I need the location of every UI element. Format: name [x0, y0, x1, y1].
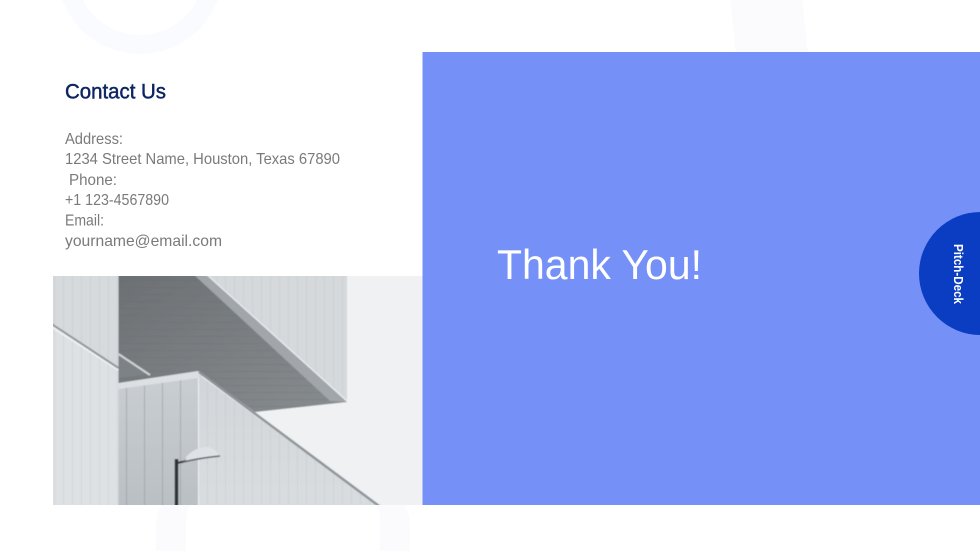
sky [50, 273, 426, 509]
text block: contact details: Phone: [69, 172, 117, 189]
background ring: top left [66, 0, 214, 44]
small ledge [119, 357, 142, 372]
upper right wall [205, 273, 347, 402]
middle block cornice [118, 371, 204, 389]
heading: Contact Us: Contact Us [65, 80, 166, 104]
background ring: bottom [156, 505, 410, 551]
panel: blue background [422, 52, 980, 505]
text block: contact details: Email: [65, 212, 104, 230]
text block: contact details: 1234 Street Name, Houston, Texas 67890 [65, 151, 340, 168]
concrete soffit [118, 273, 347, 412]
text block: contact details: yourname@email.com [65, 233, 222, 250]
text block: contact details: Address: [65, 131, 123, 148]
soffit edge [192, 273, 347, 402]
street lamp [175, 459, 178, 509]
lower right wall [199, 375, 383, 509]
text block: contact details: +1 123-4567890 [65, 192, 169, 209]
slide [53, 52, 980, 505]
heading: Thank You!: Thank You! [497, 241, 702, 288]
side tab: Pitch-Deck: Pitch-Deck [951, 244, 966, 305]
side tab: Pitch-Deck [919, 212, 980, 335]
background ring: top right [730, 0, 808, 52]
photo: concrete building with street lamp [50, 273, 426, 509]
upper left wall [50, 273, 118, 367]
lower left wall [50, 327, 118, 509]
text block: contact details [65, 131, 340, 250]
middle block front [118, 376, 198, 509]
